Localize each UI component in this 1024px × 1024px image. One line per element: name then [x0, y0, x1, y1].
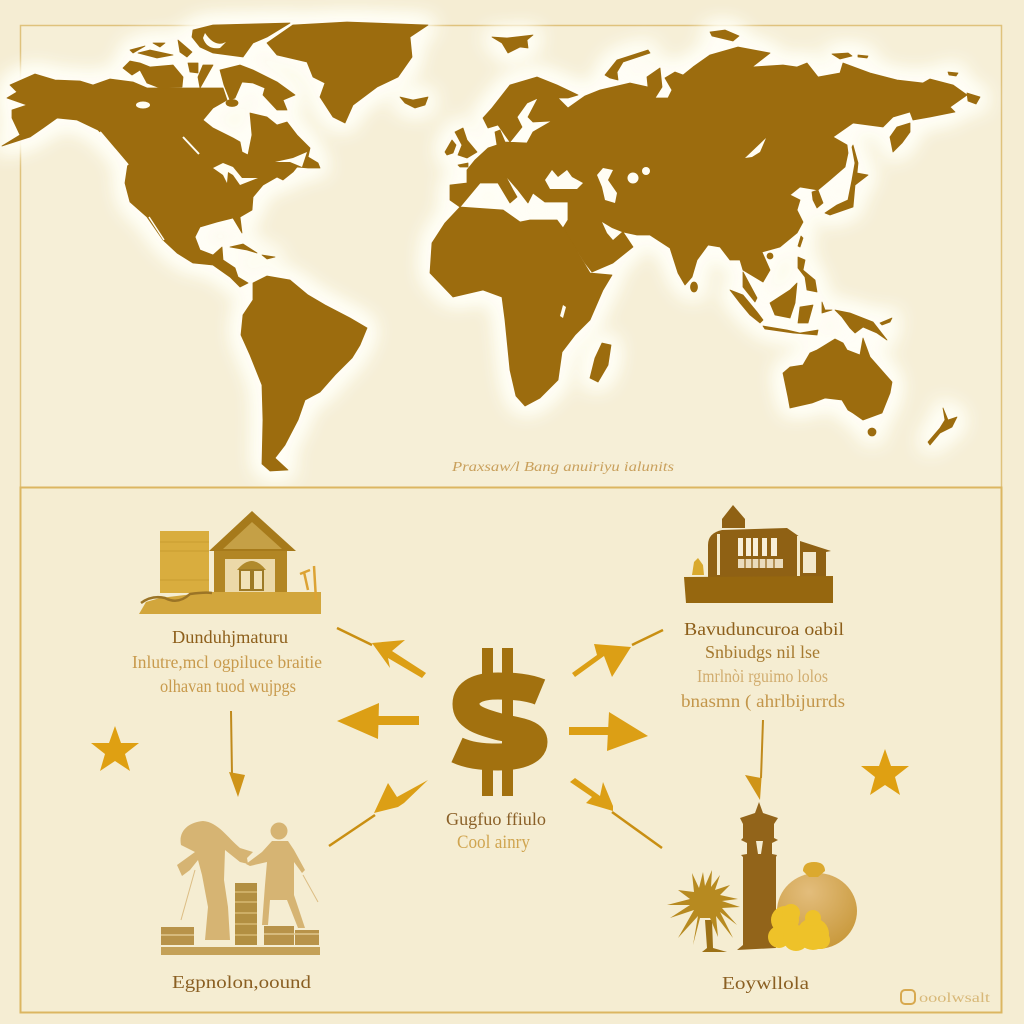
arrow: right — [569, 712, 648, 751]
icon: right star — [861, 749, 909, 795]
New Guinea — [835, 310, 887, 340]
label: bottom right: Eoywllola — [722, 973, 809, 993]
gold pile — [768, 904, 830, 951]
Africa — [430, 207, 612, 406]
Japan — [825, 145, 868, 215]
text block: left top description: Inlutre,mcl ogpiluce braitie — [132, 652, 322, 672]
text block: left top description — [132, 627, 322, 696]
gold sack — [777, 873, 857, 949]
New Zealand — [928, 408, 957, 445]
panel: trade flow — [20, 488, 1002, 1012]
arrow: upper left — [337, 628, 426, 678]
inland seas and lakes — [100, 33, 766, 318]
Brittany fragment — [458, 163, 468, 167]
Sri Lanka — [690, 282, 698, 292]
Java — [763, 326, 818, 335]
icon: dollar sign — [457, 648, 540, 796]
Madagascar — [590, 343, 611, 382]
Siberian islands — [710, 30, 739, 41]
Philippines — [798, 257, 817, 292]
arrow: lower right — [570, 778, 662, 848]
Malay Peninsula — [743, 272, 757, 302]
icon: left star — [91, 726, 139, 771]
logo mark: ooolwsalt — [919, 991, 990, 1006]
North America — [2, 74, 320, 287]
Great Britain — [455, 128, 477, 158]
text block: left top description: olhavan tuod wujpgs — [160, 676, 296, 696]
Baffin Island — [220, 65, 295, 110]
arrow: left — [337, 703, 419, 739]
world map landmasses — [2, 22, 980, 471]
Sumatra — [730, 290, 763, 323]
Novaya Zemlya — [605, 50, 650, 80]
logo mark — [901, 990, 990, 1006]
text block: center caption — [446, 809, 546, 853]
arrow: upper right — [572, 630, 663, 677]
Sulawesi — [798, 305, 813, 323]
Caribbean islands — [230, 244, 257, 253]
arrow: right vertical — [745, 720, 763, 800]
map caption: Praxsaw/l Bang anuiriyu ialunits — [451, 460, 675, 475]
icon: factory building — [684, 505, 833, 603]
Borneo — [770, 283, 797, 318]
panel: world map — [2, 22, 1002, 488]
label: bottom left: Egpnolon,oound — [172, 972, 311, 992]
text block: right top description: Bavuduncuroa oabil — [684, 619, 844, 639]
Greenland — [267, 22, 428, 123]
Svalbard — [492, 35, 533, 53]
icon: house and crate — [139, 511, 321, 614]
icon: people with stacks — [161, 821, 320, 955]
Eurasia — [450, 47, 967, 285]
Iceland — [400, 97, 428, 108]
palm tree — [667, 870, 740, 952]
Taiwan — [798, 236, 803, 247]
arrow: lower left — [329, 780, 428, 846]
text block: left top description: Dunduhjmaturu — [172, 627, 288, 647]
Arctic islands — [123, 61, 183, 88]
Australia — [783, 338, 892, 420]
South America — [241, 276, 367, 471]
Hainan — [767, 253, 773, 259]
text block: center caption: Gugfuo ffiulo — [446, 809, 546, 829]
Tasmania — [868, 428, 876, 436]
Korea — [812, 190, 823, 208]
arrow: left vertical — [229, 711, 245, 797]
text block: right top description: bnasmn ( ahrlbijurrds — [681, 691, 845, 712]
text block: right top description: Imrlnòi rguimo lolos — [697, 666, 828, 686]
text block: center caption: Cool ainry — [457, 832, 530, 853]
text block: right top description — [681, 619, 845, 712]
Kamchatka — [890, 123, 910, 152]
tower — [737, 802, 778, 950]
Ireland — [445, 140, 456, 155]
icon: tower palm and gold sack — [667, 802, 857, 952]
text block: right top description: Snbiudgs nil lse — [705, 642, 820, 662]
Moluccas — [822, 302, 832, 313]
